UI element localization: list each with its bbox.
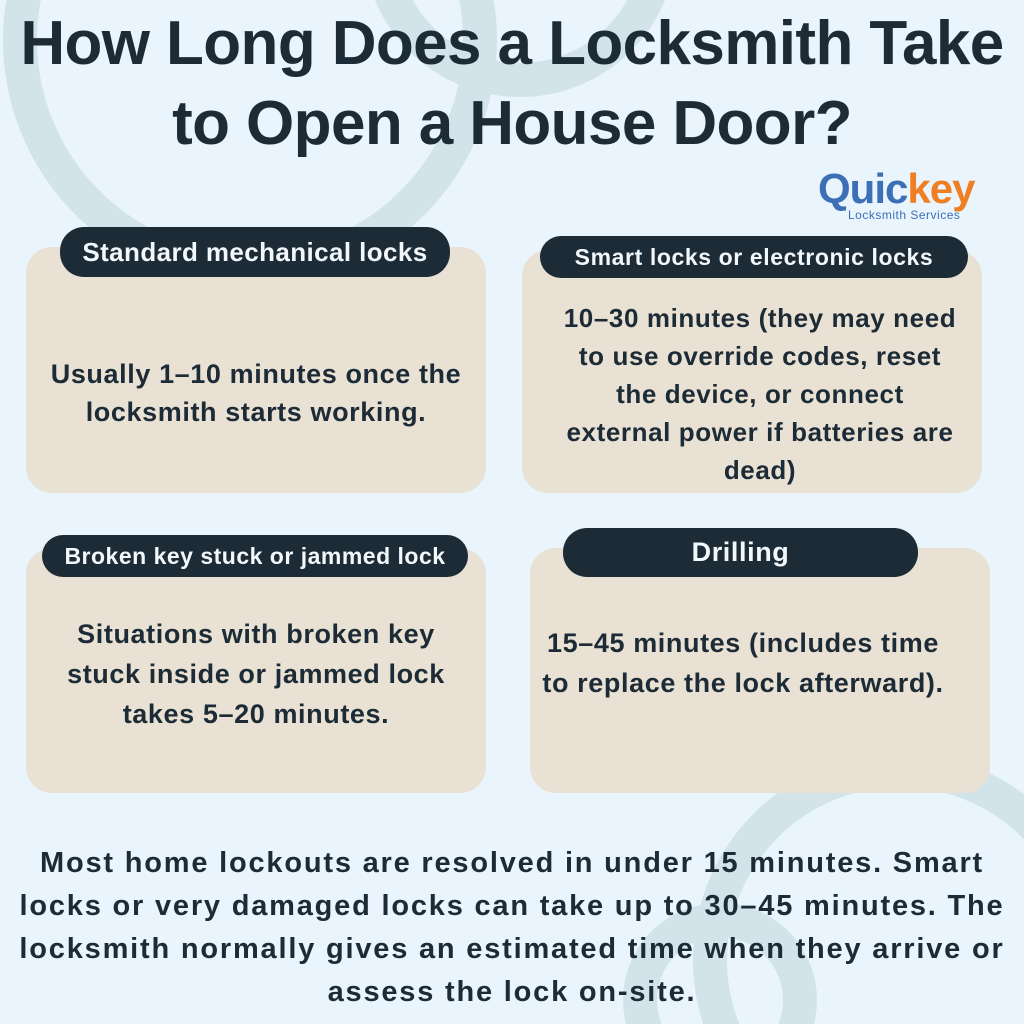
text: smart: dead) [724, 455, 796, 485]
text: smart: to use override codes, reset [579, 341, 941, 371]
heading: broken key: Broken key stuck or jammed lock [64, 542, 446, 568]
logo: Quickey: Locksmith Services [848, 208, 960, 222]
text: standard: Usually 1–10 minutes once the [51, 359, 461, 389]
heading: smart: Smart locks or electronic locks [575, 244, 933, 270]
panel: drilling [530, 548, 990, 793]
text: broken key [67, 619, 445, 729]
heading: drilling [563, 528, 918, 577]
heading: broken key [42, 535, 468, 577]
summary text: assess the lock on-site. [328, 976, 696, 1008]
logo: Quickey: Quickey [818, 165, 974, 212]
summary text: locks or very damaged locks can take up to 30–45 minutes. The [20, 890, 1004, 922]
panel: broken key [26, 548, 486, 793]
text: broken key: stuck inside or jammed lock [67, 659, 445, 689]
text: smart: 10–30 minutes (they may need [564, 303, 956, 333]
text: smart [564, 303, 956, 485]
heading: standard: Standard mechanical locks [82, 236, 428, 266]
summary text: Most home lockouts are resolved in under 15 minutes. Smart [40, 847, 984, 879]
summary text: locksmith normally gives an estimated time when they arrive or [19, 933, 1005, 965]
text: broken key: Situations with broken key [77, 619, 435, 649]
title: to Open a House Door? [172, 89, 852, 158]
text: drilling: 15–45 minutes (includes time [547, 628, 939, 658]
summary text [19, 847, 1005, 1008]
title: How Long Does a Locksmith Take [20, 9, 1004, 78]
text: drilling: to replace the lock afterward). [542, 668, 944, 698]
text: drilling [542, 628, 944, 698]
panel: standard mechanical [26, 247, 486, 493]
text: smart: the device, or connect [616, 379, 904, 409]
text: standard [51, 359, 461, 427]
panel: smart locks [522, 250, 982, 493]
heading: standard [60, 227, 450, 277]
text: standard: locksmith starts working. [86, 397, 426, 427]
heading: smart [540, 236, 968, 278]
heading: drilling: Drilling [692, 537, 789, 567]
text: broken key: takes 5–20 minutes. [123, 699, 389, 729]
text: smart: external power if batteries are [566, 417, 954, 447]
title [20, 9, 1004, 158]
